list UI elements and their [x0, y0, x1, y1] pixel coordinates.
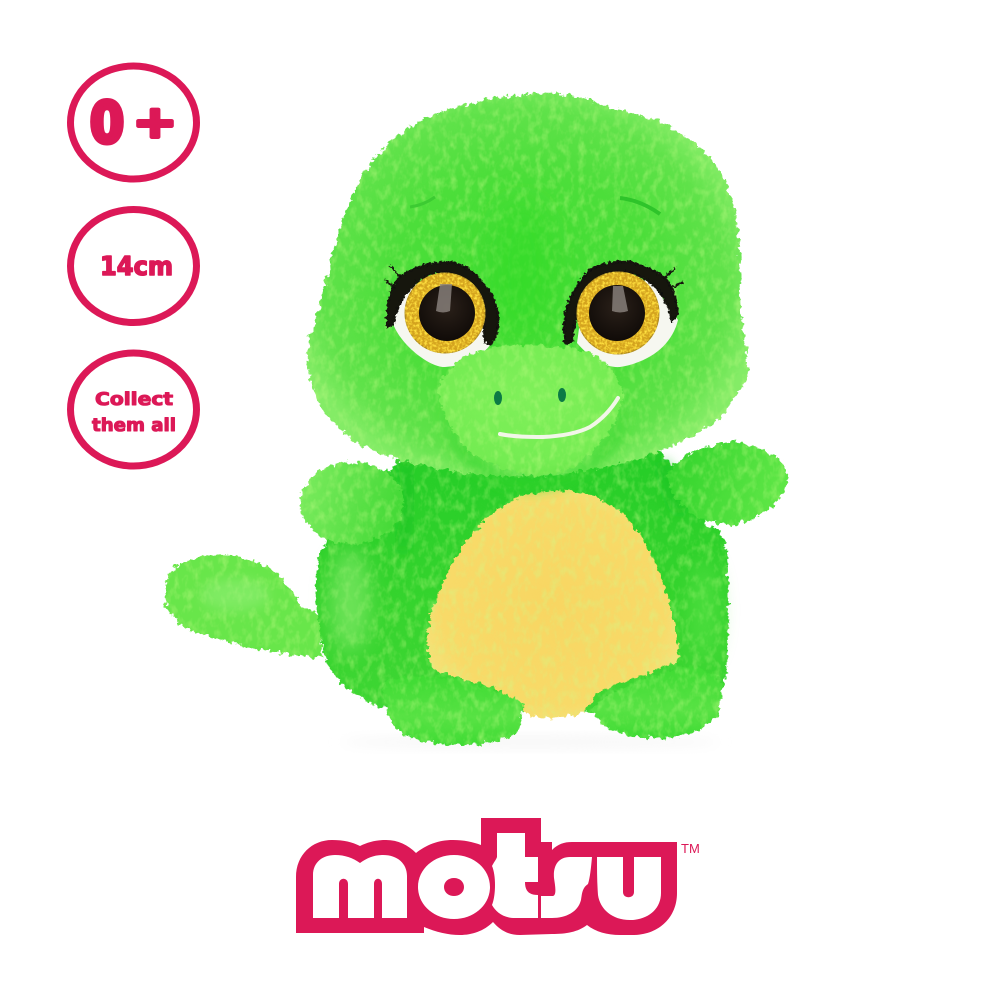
left eye gold ring [405, 273, 485, 353]
body [316, 452, 728, 715]
logo letter s [541, 857, 592, 918]
right eye gold ring [577, 272, 659, 354]
badge: age 0+: 0 [90, 91, 124, 156]
right pupil [589, 285, 645, 341]
logo: motsu [296, 818, 700, 935]
left pupil [419, 285, 475, 341]
right arm crease [664, 462, 682, 512]
right arm [667, 442, 788, 525]
badge: collect them all [70, 353, 196, 466]
plush toy: green dinosaur [165, 93, 788, 748]
right brow stitch [620, 198, 660, 214]
logo outline [296, 818, 677, 935]
head [308, 93, 748, 476]
left eye glint [436, 284, 452, 312]
forehead centre shading [490, 200, 554, 340]
right nostril [558, 388, 566, 402]
badge: age 0+ [70, 66, 196, 179]
left brow stitch [410, 197, 435, 207]
left arm crease [400, 462, 409, 550]
right eye glint [612, 286, 628, 312]
logo letter u [597, 857, 661, 920]
badge: collect them all: Collect [95, 389, 173, 410]
badge: size 14cm [70, 210, 196, 322]
right foot [592, 667, 722, 738]
left eye [385, 262, 498, 367]
left foot [383, 676, 522, 745]
right flank highlight [690, 560, 718, 660]
belly [427, 490, 678, 718]
badge: collect them all: them all [92, 415, 176, 436]
left eye white [390, 280, 490, 367]
logo letter o [418, 855, 490, 919]
tail [165, 555, 322, 658]
right eye lashes [564, 262, 683, 343]
left arm [300, 462, 404, 544]
snout [437, 345, 623, 475]
tail curl highlight [201, 579, 269, 611]
trademark: TM [681, 841, 700, 856]
right eye [564, 262, 683, 367]
left flank highlight [330, 548, 370, 652]
ground shadow [340, 736, 720, 748]
mouth [500, 398, 618, 437]
logo letter m [313, 855, 407, 918]
left nostril [494, 391, 502, 405]
logo letter t [492, 833, 538, 918]
right eye white [577, 280, 678, 367]
shadow under snout [445, 400, 626, 490]
badge: age 0+: + [133, 97, 177, 148]
badge: size 14cm: 14cm [100, 252, 173, 282]
left eye lashes [385, 262, 498, 345]
